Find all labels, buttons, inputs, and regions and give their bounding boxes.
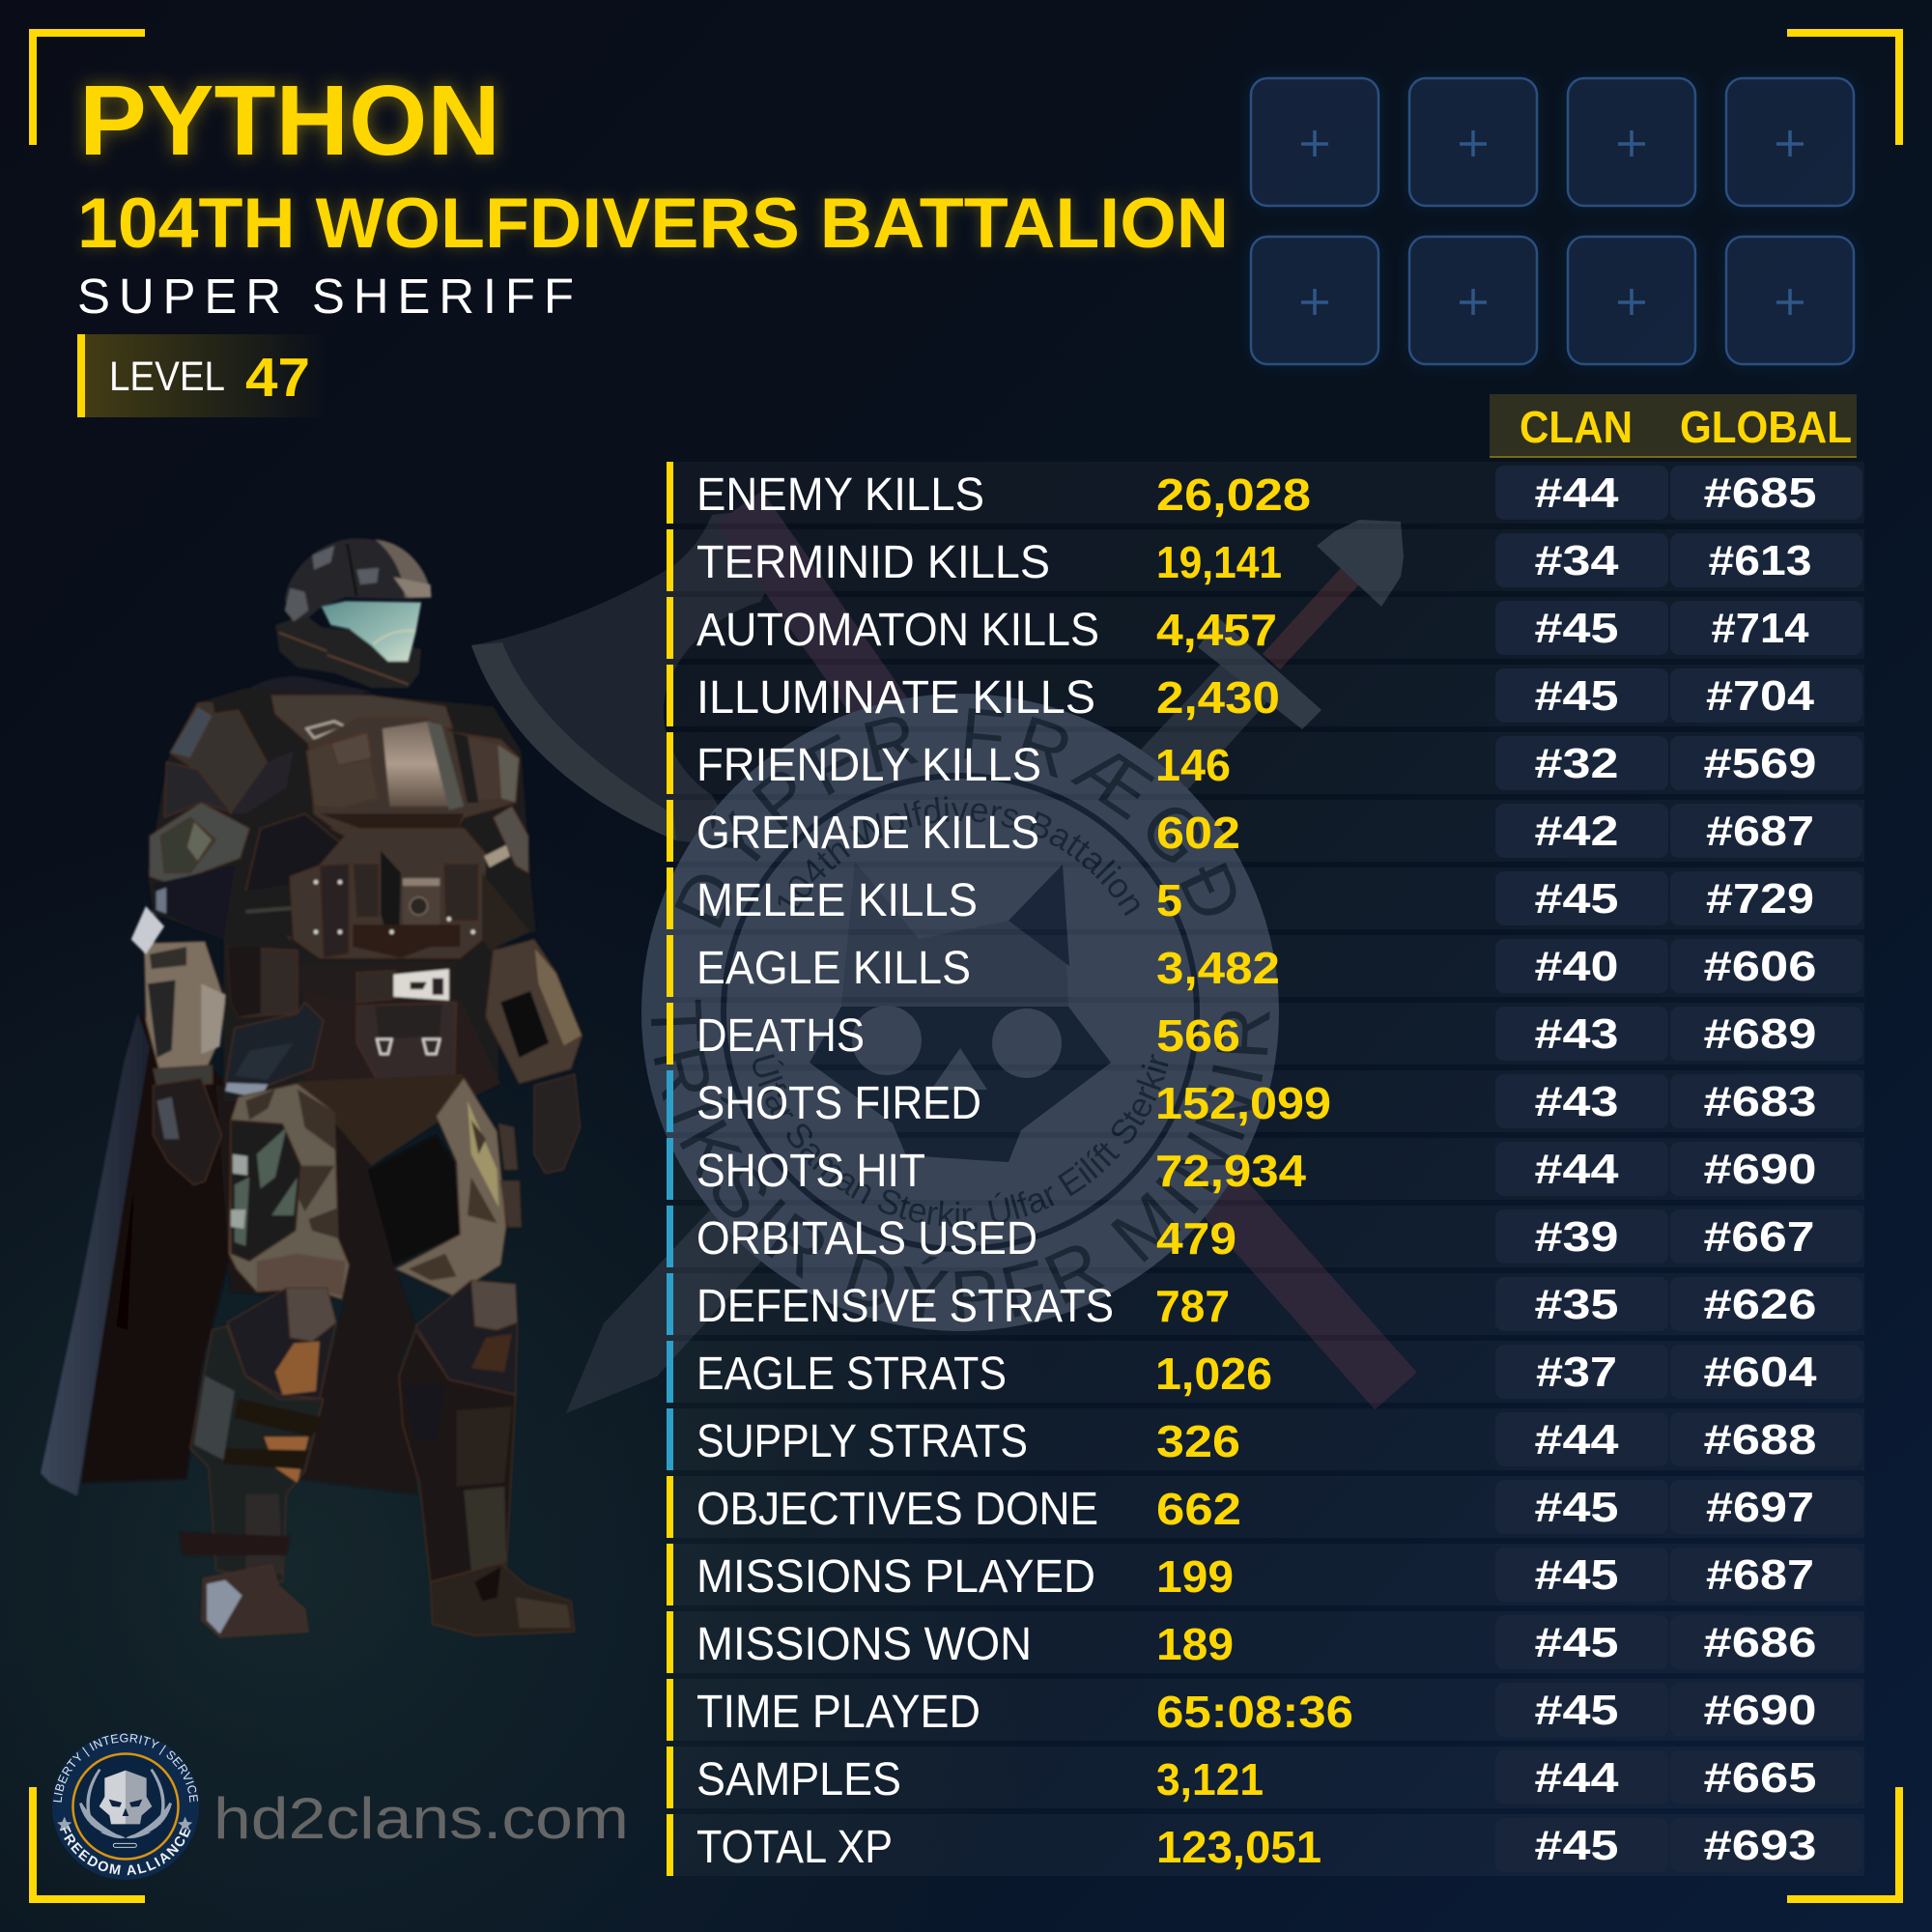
row: friendly kills: FRIENDLY KILLS	[696, 740, 1041, 791]
table header: clan and global	[1490, 394, 1857, 458]
level badge: LEVEL	[109, 354, 225, 400]
row: defensive strats: #35	[1534, 1281, 1619, 1328]
table header: clan and global: GLOBAL	[1680, 402, 1852, 452]
camo shoulder plate	[150, 803, 249, 888]
row: objectives done: #45	[1534, 1484, 1619, 1531]
row: melee kills: 5	[1156, 875, 1182, 925]
inner ring text: 104th Wolfdivers Battalion	[779, 796, 1140, 916]
row: automaton kills: #714	[1712, 605, 1809, 652]
right arm	[482, 873, 530, 951]
logo: freedom alliance badge: FREEDOM ALLIANCE	[60, 1826, 191, 1876]
torso rig	[290, 829, 486, 958]
logo: freedom alliance badge	[52, 1733, 199, 1880]
stat rows	[667, 462, 1864, 1876]
hip pouch	[227, 947, 298, 1017]
row: samples	[667, 1747, 1864, 1808]
row: eagle kills: #40	[1534, 943, 1619, 990]
row: defensive strats	[667, 1273, 1864, 1335]
dark abdomen armor	[245, 813, 346, 939]
row: shots fired	[667, 1070, 1864, 1132]
row: time played: TIME PLAYED	[696, 1687, 980, 1738]
row: objectives done: OBJECTIVES DONE	[696, 1484, 1098, 1535]
row: shots fired: 152,099	[1155, 1078, 1331, 1128]
row: friendly kills: #32	[1534, 740, 1619, 787]
row: eagle kills: #606	[1704, 943, 1816, 990]
cape	[41, 1013, 417, 1496]
helmet	[275, 538, 431, 688]
left gauntlet	[144, 941, 225, 1076]
row: grenade kills	[667, 800, 1864, 862]
collar	[271, 696, 453, 744]
hammer head	[1317, 520, 1404, 607]
row: terminid kills: #34	[1534, 537, 1619, 584]
row: terminid kills: #613	[1708, 537, 1812, 584]
row: eagle kills: 3,482	[1156, 943, 1280, 993]
row: missions won: MISSIONS WON	[696, 1619, 1032, 1670]
row: automaton kills	[667, 597, 1864, 659]
left knee	[227, 1288, 336, 1399]
row: orbitals used: 479	[1156, 1213, 1236, 1264]
row: deaths	[667, 1003, 1864, 1065]
row: objectives done: 662	[1156, 1484, 1241, 1534]
right knee	[415, 1280, 518, 1395]
watermark: battalion emblem	[471, 492, 1416, 1413]
outer rune ring: DÝPFR FRÆGÐ	[674, 708, 1236, 927]
axe head	[471, 509, 792, 850]
left arm	[154, 866, 235, 939]
row: grenade kills: GRENADE KILLS	[696, 808, 1039, 859]
upper body	[131, 676, 582, 1101]
website url: hd2clans.com	[213, 1786, 629, 1851]
title: player name: PYTHON	[79, 65, 500, 176]
chain	[113, 1843, 136, 1847]
row: total xp: #45	[1534, 1822, 1619, 1869]
row: samples: 3,121	[1156, 1754, 1264, 1804]
outer rune ring: TRÍKSIR DÝPFR MINNIR	[651, 999, 1269, 1322]
sword blade	[566, 647, 1280, 1413]
row: deaths: #43	[1534, 1010, 1619, 1058]
row: missions played: #45	[1534, 1551, 1619, 1599]
logo: freedom alliance badge: LIBERTY | INTEGRITY | SERVICE	[53, 1733, 198, 1842]
row: enemy kills	[667, 462, 1864, 524]
row: time played: #45	[1534, 1687, 1619, 1734]
row: time played: #690	[1704, 1687, 1816, 1734]
laurel	[80, 1770, 171, 1835]
row: defensive strats: 787	[1155, 1281, 1230, 1331]
inner ring text	[753, 796, 1169, 1231]
row: missions played: #687	[1706, 1551, 1814, 1599]
row: eagle strats: EAGLE STRATS	[696, 1349, 1007, 1400]
lower body	[154, 1074, 581, 1637]
row: terminid kills	[667, 529, 1864, 591]
row: deaths: 566	[1156, 1010, 1240, 1061]
row: friendly kills	[667, 732, 1864, 794]
row: missions won: 189	[1156, 1619, 1234, 1669]
row: terminid kills: TERMINID KILLS	[696, 537, 1050, 588]
row: shots hit: 72,934	[1155, 1146, 1306, 1196]
hips	[298, 1074, 464, 1166]
row: grenade kills: #687	[1706, 808, 1814, 855]
row: shots hit: #690	[1704, 1146, 1816, 1193]
row: eagle strats: #604	[1704, 1349, 1817, 1396]
row: missions played: 199	[1156, 1551, 1234, 1602]
row: deaths: DEATHS	[696, 1010, 865, 1062]
row: shots fired: #43	[1534, 1078, 1619, 1125]
wolf head	[810, 862, 1111, 1162]
right gauntlet	[486, 939, 582, 1084]
row: orbitals used: #39	[1534, 1213, 1619, 1261]
row: shots fired: #683	[1704, 1078, 1816, 1125]
row: supply strats: #44	[1534, 1416, 1619, 1463]
outer rune ring	[651, 708, 1269, 1322]
inner ring text: Úlfar Saman Sterkir, Úlfar Eilíft Sterkir	[753, 1054, 1169, 1231]
row: illuminate kills: #704	[1706, 672, 1815, 720]
row: missions won: #686	[1704, 1619, 1816, 1666]
row: time played	[667, 1679, 1864, 1741]
sword guard	[1198, 618, 1321, 729]
row: automaton kills: AUTOMATON KILLS	[696, 605, 1099, 656]
row: missions played	[667, 1544, 1864, 1605]
right shin	[399, 1330, 516, 1582]
belt and buckle	[298, 961, 456, 1003]
row: supply strats: #688	[1704, 1416, 1816, 1463]
row: automaton kills: 4,457	[1156, 605, 1277, 655]
left shoulder armor	[170, 703, 268, 813]
skull	[99, 1771, 126, 1824]
row: total xp	[667, 1814, 1864, 1876]
soldier figure	[41, 538, 582, 1637]
row: defensive strats: #626	[1704, 1281, 1816, 1328]
row: eagle strats: #37	[1536, 1349, 1617, 1396]
row: terminid kills: 19,141	[1156, 537, 1282, 587]
row: total xp: #693	[1704, 1822, 1816, 1869]
row: automaton kills: #45	[1534, 605, 1619, 652]
level badge: 47	[245, 347, 310, 409]
left thigh camo	[229, 1084, 349, 1299]
row: missions won: #45	[1534, 1619, 1619, 1666]
row: grenade kills: 602	[1156, 808, 1240, 858]
belly	[298, 991, 500, 1101]
row: missions won	[667, 1611, 1864, 1673]
left boot	[201, 1565, 308, 1637]
right boot	[431, 1563, 575, 1635]
waist pouch	[356, 1003, 456, 1088]
row: shots hit: #44	[1534, 1146, 1619, 1193]
row: melee kills	[667, 867, 1864, 929]
clan name heading: 104TH WOLFDIVERS BATTALION	[77, 185, 1229, 263]
row: eagle kills	[667, 935, 1864, 997]
row: illuminate kills: #45	[1534, 672, 1619, 720]
row: samples: #44	[1534, 1754, 1619, 1802]
row: objectives done	[667, 1476, 1864, 1538]
sword grip	[1263, 568, 1359, 669]
row: grenade kills: #42	[1534, 808, 1619, 855]
row: objectives done: #697	[1706, 1484, 1814, 1531]
row: defensive strats: DEFENSIVE STRATS	[696, 1281, 1114, 1332]
row: orbitals used	[667, 1206, 1864, 1267]
empty medal slots	[1251, 78, 1854, 364]
row: enemy kills: 26,028	[1156, 469, 1311, 520]
table header: clan and global: CLAN	[1520, 402, 1633, 452]
row: total xp: 123,051	[1156, 1822, 1321, 1872]
row: enemy kills: #44	[1534, 469, 1619, 517]
chest armor	[308, 718, 520, 829]
emblem disc	[641, 694, 1279, 1331]
row: enemy kills: #685	[1704, 469, 1816, 517]
row: eagle kills: EAGLE KILLS	[696, 943, 971, 994]
row: samples: SAMPLES	[696, 1754, 901, 1805]
row: supply strats: SUPPLY STRATS	[696, 1416, 1028, 1467]
row: total xp: TOTAL XP	[696, 1822, 893, 1873]
row: orbitals used: #667	[1704, 1213, 1814, 1261]
row: melee kills: #729	[1706, 875, 1814, 923]
stars	[57, 1817, 192, 1831]
gloves	[154, 1078, 221, 1185]
row: shots hit	[667, 1138, 1864, 1200]
left shin	[190, 1326, 324, 1582]
row: illuminate kills: 2,430	[1156, 672, 1280, 723]
rank title: SUPER SHERIFF	[77, 269, 574, 324]
row: shots fired: SHOTS FIRED	[696, 1078, 981, 1129]
axe handle	[739, 507, 1396, 1391]
right thigh camo	[395, 1078, 506, 1295]
row: melee kills: #45	[1534, 875, 1619, 923]
row: supply strats	[667, 1408, 1864, 1470]
row: illuminate kills	[667, 665, 1864, 726]
row: supply strats: 326	[1156, 1416, 1240, 1466]
row: samples: #665	[1704, 1754, 1816, 1802]
hip guard	[225, 1003, 324, 1086]
row: friendly kills: 146	[1155, 740, 1231, 790]
row: melee kills: MELEE KILLS	[696, 875, 978, 926]
row: deaths: #689	[1704, 1010, 1816, 1058]
row: friendly kills: #569	[1704, 740, 1816, 787]
row: orbitals used: ORBITALS USED	[696, 1213, 1037, 1264]
row: time played: 65:08:36	[1156, 1687, 1353, 1737]
row: eagle strats	[667, 1341, 1864, 1403]
row: eagle strats: 1,026	[1155, 1349, 1272, 1399]
row: missions played: MISSIONS PLAYED	[696, 1551, 1095, 1603]
row: illuminate kills: ILLUMINATE KILLS	[696, 672, 1095, 724]
row: enemy kills: ENEMY KILLS	[696, 469, 984, 521]
level badge	[77, 334, 328, 417]
row: shots hit: SHOTS HIT	[696, 1146, 925, 1197]
